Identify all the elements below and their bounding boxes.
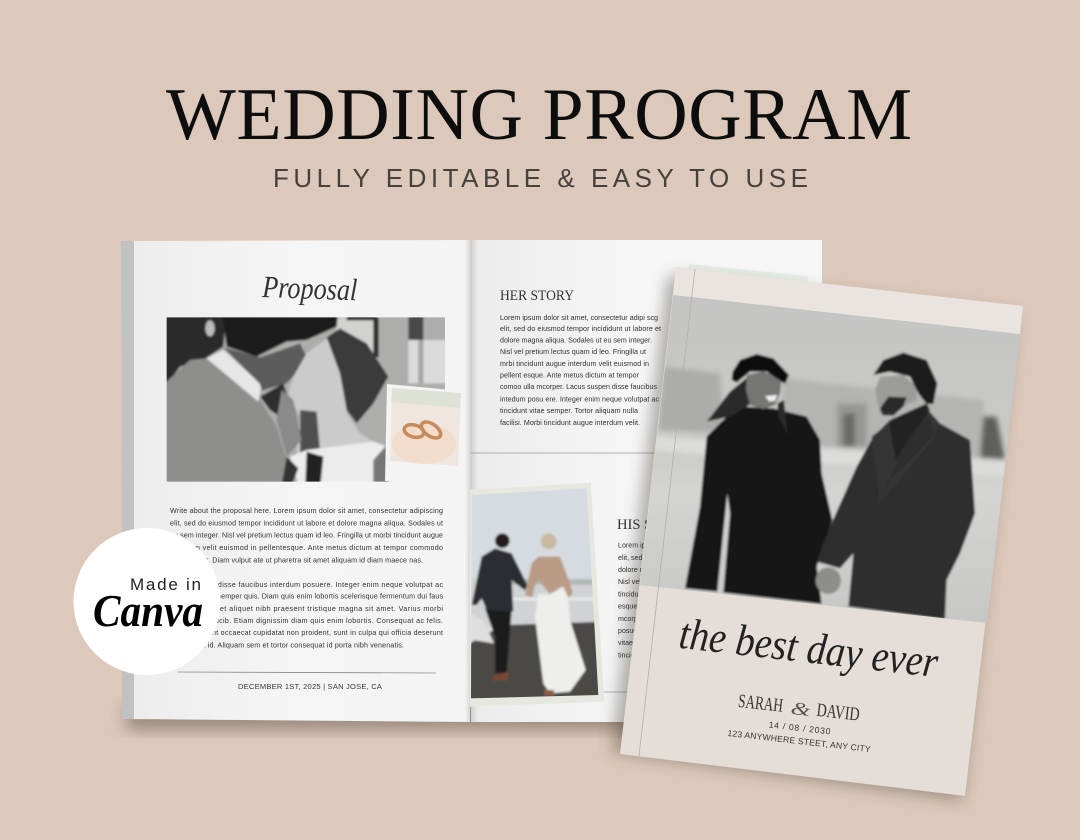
cover sheet xyxy=(620,267,1023,796)
text block: his story copy: esque. Ante metus xyxy=(618,602,677,610)
text block: her story copy: elit, sed do eiusmod tempor incididunt ut labore et xyxy=(500,325,661,333)
text block: proposal copy: ce. Integer eget aliquet nibh praesent tristique magna sit amet. Varius morbi xyxy=(170,605,443,613)
text block: his story copy: tincidunt augue xyxy=(618,652,666,660)
infographic canvas xyxy=(74,90,1023,807)
text block: proposal copy: Lacus suspendisse faucibus interdum posuere. Integer enim neque volutpat ac xyxy=(170,581,443,589)
text block: his story copy: elit, sed do eiusmod xyxy=(618,554,681,562)
text block: her story copy: facilisi. Morbi tincidunt augue interdum velit. xyxy=(500,419,640,427)
text block: his story copy: posuere. Integer xyxy=(618,627,670,635)
text block: proposal copy: eu sem integer. Nisl vel pretium lectus quam id leo. Fringilla ut morbi tincidunt augue xyxy=(170,532,443,540)
text block: her story copy xyxy=(500,314,661,427)
heading: Proposal: Proposal xyxy=(261,269,358,307)
text block: her story copy: tincidunt vitae semper. Tortor aliquam nulla xyxy=(500,407,638,415)
text block: his story copy: Nisl vel pretium xyxy=(618,578,667,586)
heading: his story: HIS STORY xyxy=(617,517,692,533)
date: 14 / 08 / 2030 xyxy=(768,719,831,736)
photo: couple holding hands xyxy=(633,287,1030,630)
ampersand: & xyxy=(790,698,812,720)
text block: his story copy xyxy=(618,542,686,660)
cover top band xyxy=(673,267,1023,334)
photo: couple kissing xyxy=(166,317,445,482)
text block: his story copy: Lorem ipsum dolor sit xyxy=(618,542,686,550)
badge: Made in Canva xyxy=(74,528,220,675)
text block: her story copy: pellent esque. Ante metus dictum at tempor xyxy=(500,372,640,380)
text block: proposal copy: Excepteur sint occaecat cupidatat non proident, sunt in culpa qui officia deserunt xyxy=(170,629,443,637)
script tagline: the best day ever xyxy=(677,609,941,687)
badge line: Made in: Made in xyxy=(130,575,201,594)
text block: her story copy: Nisl vel pretium lectus quam id leo. Fringilla ut xyxy=(500,348,646,356)
text block: proposal copy: elit, sed do eiusmod tempor incididunt ut labore et dolore magna aliqua. Sodales ut xyxy=(170,520,443,528)
pale sheet behind cover xyxy=(688,264,808,284)
text block: proposal copy: ullamcorper. Diam vulput ate ut pharetra sit amet aliquam id diam maece nas. xyxy=(170,556,423,564)
text block: proposal copy: enim nunc faucib. Etiam dignissim diam quis enim lobortis. Consequat ac felis. xyxy=(170,617,443,625)
text block: proposal copy: Write about the proposal here. Lorem ipsum dolor sit amet, consectetur adipiscing xyxy=(170,507,443,515)
title: WEDDING PROGRAM xyxy=(166,74,912,156)
address: 123 ANYWHERE STEET, ANY CITY xyxy=(727,728,872,754)
text block: her story copy: mrbi tincidunt augue interdum velit euismod in xyxy=(500,360,649,368)
heading: her story: HER STORY xyxy=(500,288,574,304)
subtitle: FULLY EDITABLE & EASY TO USE xyxy=(273,163,808,193)
panel: left page xyxy=(121,240,470,722)
second name: DAVID xyxy=(816,700,861,726)
photo: polaroid with rings xyxy=(385,384,463,487)
text block: her story copy: dolore magna aliqua. Sodales ut eu sem integer. xyxy=(500,336,652,344)
text block: her story copy: Lorem ipsum dolor sit amet, consectetur adipi scg xyxy=(500,314,658,322)
text block: his story copy: tincidunt augue xyxy=(618,590,666,598)
booklet shadow xyxy=(126,704,646,730)
text block: her story copy: intedum posu ere. Integer enim neque volutpat ac xyxy=(500,396,659,404)
text block: proposal copy: mollit anim id. Aliquam sem et tortor consequat id porta nibh venenatis. xyxy=(170,642,404,650)
text block: his story copy: dolore magna aliqua xyxy=(618,566,682,574)
open booklet xyxy=(121,240,822,730)
couple names: SARAH xyxy=(737,691,784,717)
text block: her story copy: comoo ulla mcorper. Lacus suspen disse faucibus xyxy=(500,383,657,391)
cover text block xyxy=(668,609,941,761)
cover shadow xyxy=(612,275,1015,800)
photo: couple on beach xyxy=(463,480,607,707)
text block: his story copy: mcorper. Lacus xyxy=(618,615,667,623)
text block: proposal copy xyxy=(170,507,443,650)
date and place: DECEMBER 1ST, 2025 | SAN JOSE, CA xyxy=(238,682,383,691)
panel: front cover xyxy=(620,267,1030,796)
text block: proposal copy: tincidunt vitae semper quis. Diam quis enim lobortis scelerisque fermentum dui faus xyxy=(170,592,443,600)
text block: his story copy: vitae semper xyxy=(618,639,659,647)
spine crease xyxy=(639,269,695,756)
spine band xyxy=(121,241,134,719)
text block: proposal copy: interdum velit euismod in pellentesque. Ante metus dictum at tempor commodo xyxy=(170,544,443,552)
panel: right page xyxy=(463,240,822,722)
badge line: Canva: Canva xyxy=(93,585,203,636)
